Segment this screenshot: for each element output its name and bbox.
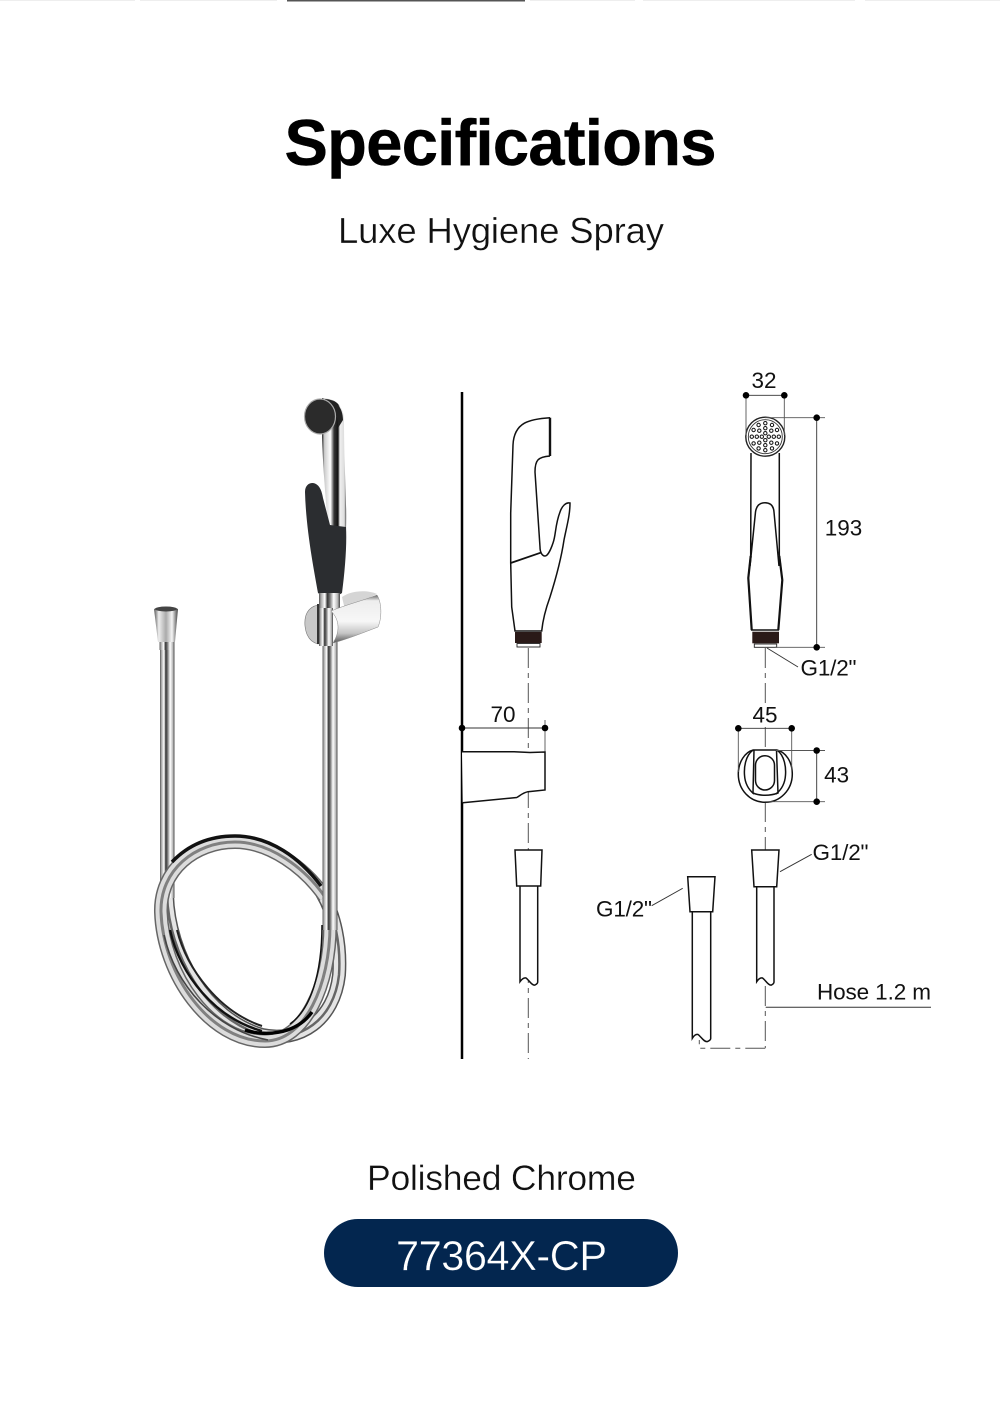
hose: rear strand from end fitting around the bottom (160, 640, 339, 1037)
holder stem (319, 593, 340, 609)
front spray outline (748, 453, 782, 630)
dimension 70: 70 (490, 702, 516, 727)
side hose outline (515, 850, 542, 985)
model number pill (324, 1219, 678, 1287)
dimension 43 (765, 747, 849, 805)
dimension 43: 43 (824, 762, 849, 787)
hose: dark reflections (164, 836, 321, 1040)
front hose outline (752, 850, 779, 985)
side view spray outline (511, 418, 570, 631)
side holder outline (462, 752, 545, 803)
wall line (461, 392, 463, 1059)
finish label: Polished Chrome (367, 1158, 636, 1198)
hose end cone (154, 606, 178, 650)
wall holder cylinder (331, 595, 381, 643)
hose: front loop from right pipe around the ring (161, 640, 330, 1041)
dimension 32 (743, 368, 788, 435)
dimension 32: 32 (751, 368, 777, 393)
dimension 45 (735, 703, 795, 772)
dimension 45: 45 (752, 703, 778, 728)
hose connection dashes (699, 1040, 765, 1048)
spray head face (304, 399, 336, 434)
label G1/2 upper hose: G1/2" (812, 840, 868, 865)
grip dark edges (748, 556, 782, 630)
side thread (515, 632, 542, 643)
holder back and clamp disc (305, 591, 377, 644)
dimension 193: 193 (825, 516, 862, 541)
stem in front of clamp (319, 608, 333, 646)
product photo: chrome hygiene spray with hose and holder (154, 398, 381, 1041)
front view technical drawing (596, 368, 931, 1048)
front centre line (764, 648, 766, 1048)
label G1/2 upper hose (780, 840, 868, 872)
front grip slot (750, 503, 779, 566)
side view technical drawing (459, 392, 570, 1059)
grip seam (511, 553, 541, 563)
title: Specifications (284, 106, 716, 179)
spray face circle (746, 417, 785, 456)
front thread (752, 632, 779, 643)
side nut (517, 644, 540, 647)
hose: right pipe highlight (290, 640, 338, 1024)
label G1/2 lower hose: G1/2" (596, 897, 652, 922)
side centre line (527, 648, 529, 1059)
spray head body: chrome (322, 398, 346, 530)
black trigger grip (305, 483, 346, 597)
model number pill: 77364X-CP (396, 1232, 607, 1279)
nozzle face edge (549, 418, 551, 456)
label G1/2 lower hose (596, 888, 683, 922)
subtitle: Luxe Hygiene Spray (338, 210, 665, 251)
head shoulder reflection (325, 399, 343, 428)
label G1/2 thread: G1/2" (800, 656, 856, 681)
dimension 70 (459, 702, 548, 752)
second hose outline (688, 877, 715, 1042)
front nut (754, 644, 777, 647)
label G1/2 thread (767, 648, 856, 681)
label hose length: Hose 1.2 m (817, 979, 931, 1004)
front holder drawing (738, 750, 792, 802)
dimension 193 (765, 414, 862, 651)
top tab bar (0, 0, 1000, 2)
